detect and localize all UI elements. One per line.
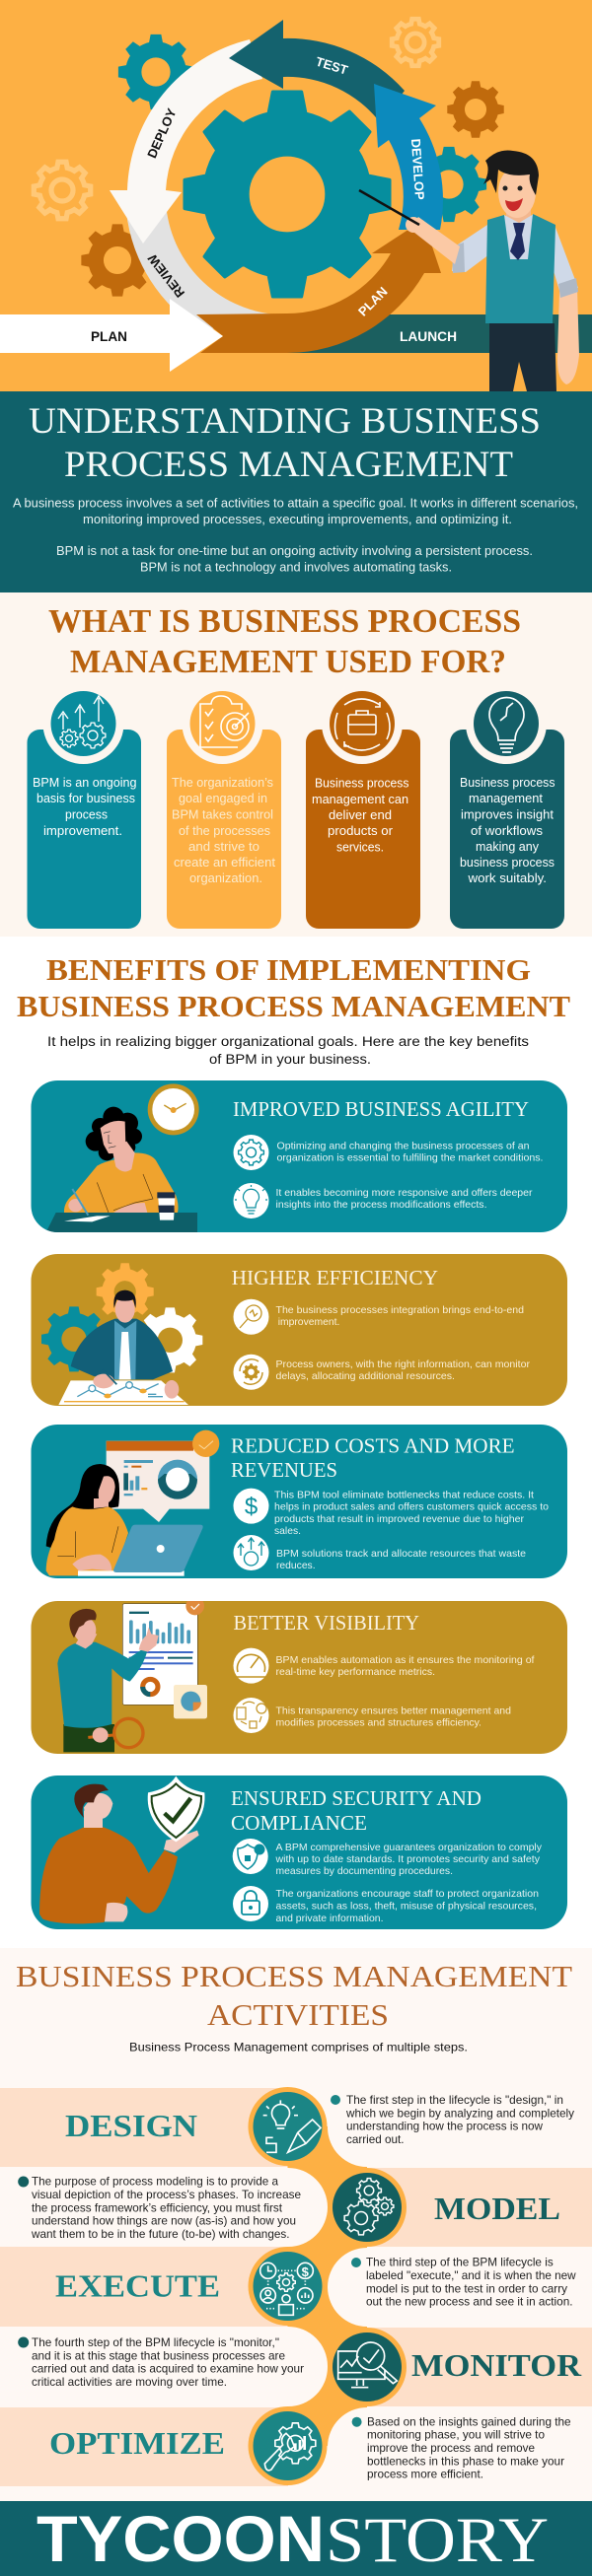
heading: ensured security and compliance: ENSURED SECURITY AND [231,1786,481,1810]
heading: better visibility: BETTER VISIBILITY [233,1611,419,1635]
heading: reduced costs and more revenues: REDUCED COSTS AND MORE [231,1433,515,1457]
step: design [65,2092,574,2161]
text: model description: want them to be in the future (to-be) with changes. [31,2227,290,2241]
illustration: man presenting report [57,1597,207,1752]
text block: intro: BPM is not a technology and involves automating tasks. [140,560,452,574]
text: security point two: assets, such as loss, theft, misuse of physical resources, [276,1901,537,1913]
card: improves insight [450,683,564,929]
heading: understanding business process management: UNDERSTANDING BUSINESS [29,401,541,442]
heading: reduced costs and more revenues: REVENUES [231,1458,337,1482]
heading: what is BPM used for [48,603,521,680]
text: costs point one: helps in product sales and offers customers quick access to [274,1501,549,1513]
heading: execute: EXECUTE [55,2268,220,2304]
arrow: deploy [110,39,262,244]
text: optimize description: Based on the insights gained during the [367,2414,571,2428]
heading: what is BPM used for: MANAGEMENT USED FOR? [70,644,506,680]
icon: arrows and gears [58,696,106,748]
text: design description: understanding how the process is now [346,2120,543,2133]
text: card one: process [65,808,108,822]
panel: reduced costs and more revenues [32,1425,567,1578]
icon: workflow circle [233,1698,268,1733]
text block: intro: A business process involves a set of activities to attain a specific goal. It works in different scenarios, [13,497,578,511]
icon: briefcase cycle [335,699,390,750]
label: plan: PLAN [91,328,127,344]
text: execute description: out the new process and see it in action. [366,2295,572,2309]
icon: faint gear top right [392,19,439,66]
text: card two [172,776,276,885]
text: costs point one: sales. [274,1525,301,1537]
text: card one: basis for business [37,792,135,805]
text: agility point one: Optimizing and changing the business processes of an [276,1141,530,1152]
text: card two: goal engaged in [179,792,267,805]
icon: execute network: $ [302,2264,310,2279]
icon: padlock circle [233,1886,268,1921]
heading: what is BPM used for: WHAT IS BUSINESS PROCESS [48,603,521,640]
text: security point one [274,1842,543,1877]
text: activities intro: Business Process Management comprises of multiple steps. [129,2041,468,2054]
text: costs point two: BPM solutions track and allocate resources that waste [276,1548,526,1560]
footer: Tycoonstory logo: STORY [326,2505,549,2576]
label: develop: DEVELOP [408,138,427,201]
text: agility point two: It enables becoming more responsive and offers deeper [276,1187,533,1199]
text: model description [18,2175,301,2241]
text: execute description: model is put to the test in order to carry [366,2281,567,2295]
icon: dollar circle: $ [245,1494,258,1520]
text: design description: The first step in the lifecycle is "design," in [346,2093,563,2107]
text: card three: Business process [315,777,408,791]
text: model description: The purpose of process modeling is to provide a [32,2175,278,2189]
text: visibility point two: modifies processes and structures efficiency. [276,1717,481,1729]
heading: higher efficiency: HIGHER EFFICIENCY [232,1266,438,1289]
icon: brown gear left [81,224,154,297]
text: optimize description: monitoring phase, you will strive to [367,2428,545,2442]
panel: higher efficiency [32,1254,567,1406]
text: monitor description: carried out and data is acquired to examine how your [32,2362,304,2376]
arrow: develop [374,84,443,230]
text: optimize description [352,2414,571,2481]
footer: Tycoonstory logo: TYCOON [37,2502,325,2575]
card: organization goal [167,683,281,929]
text: security point one: measures by documenting procedures. [276,1865,453,1877]
text: card two: of the processes [179,824,270,838]
text block: intro: BPM is not a task for one-time but an ongoing activity involving a persistent process. [56,544,533,558]
text: card two: organization. [189,871,262,885]
card: ongoing basis [28,683,141,929]
heading: understanding business process management [29,401,541,485]
text: card three [312,777,408,854]
heading: improved business agility: IMPROVED BUSINESS AGILITY [233,1097,529,1121]
footer: Tycoonstory logo [0,2501,592,2576]
text: efficiency point two: Process owners, with the right information, can monitor [276,1358,531,1370]
text: optimize description: process more efficient. [367,2468,483,2481]
icon: revenue arrows circle [233,1535,268,1570]
panel: BPM activities [0,1948,592,2501]
icon: clipboard target [200,696,249,747]
panel: what is BPM used for [0,592,592,937]
heading: ensured security and compliance: COMPLIANCE [231,1811,367,1835]
text: costs point one [274,1489,549,1537]
text: card two: create an efficient [174,856,276,870]
text: optimize description: improve the process and remove [367,2441,535,2455]
text: model description: visual depiction of the process’s phases. To increase [32,2188,301,2201]
panel: ensured security and compliance [32,1775,567,1929]
text: monitor description: critical activities are moving over time. [32,2375,227,2389]
text: visibility point one: BPM enables automation as it ensures the monitoring of [276,1654,535,1666]
text: agility point two [276,1187,533,1211]
text: card four: business process [460,856,555,870]
icon: teal gear right [411,147,486,222]
text: agility point one [276,1141,543,1164]
text: execute description: The third step of the BPM lifecycle is [366,2256,554,2269]
icon: design bulb and pencil [253,2092,322,2161]
text block: intro: monitoring improved processes, executing improvements, and optimizing it. [83,513,512,526]
text: card four: making any [476,840,540,854]
text: security point two: The organizations encourage staff to protect organization [276,1888,539,1900]
card: deliver products [306,683,420,929]
step: optimize [49,2411,571,2481]
text: efficiency point two [276,1358,531,1382]
step: monitor [18,2332,582,2402]
text: card one: BPM is an ongoing [33,776,137,790]
icon: shield lock circle [233,1839,268,1874]
text: costs point one: This BPM tool eliminate bottlenecks that reduce costs. It [274,1489,534,1500]
text: card four: improves insight [461,808,555,822]
heading: benefits of implementing BPM [17,952,570,1023]
text: card three: deliver end [329,808,392,822]
heading: benefits of implementing BPM: BUSINESS PROCESS MANAGEMENT [17,989,570,1023]
text: card one [33,776,137,838]
text: security point one: A BPM comprehensive guarantees organization to comply [276,1842,543,1853]
icon: gear circle [233,1135,268,1170]
text: agility point one: organization is essential to fulfilling the market conditions. [276,1152,543,1164]
text: card four: work suitably. [467,871,547,885]
text: security point two: and private information. [276,1913,383,1924]
heading: ensured security and compliance [231,1786,481,1835]
icon: faint gear left [34,162,91,219]
icon: dollar circle [233,1489,268,1524]
text block: benefits intro [47,1034,529,1067]
icon: model gears [333,2173,402,2242]
illustration: woman writing at desk [30,1083,199,1232]
icon: gauge circle [233,1648,268,1684]
text: visibility point two [276,1706,511,1729]
arrow: plan white [0,299,223,372]
text: card three: management can [312,793,408,806]
text: optimize description: bottlenecks in this phase to make your [367,2454,564,2468]
text: card four [460,776,555,885]
label: review: REVIEW [144,250,187,301]
text: monitor description: and it is at this stage that business processes are [32,2348,285,2362]
text: card two: The organization’s [172,776,273,790]
text: monitor description [18,2335,304,2389]
illustration: woman with laptop and dashboard [46,1430,219,1576]
icon: monitor and magnifier [333,2332,402,2402]
heading: understanding business process management: PROCESS MANAGEMENT [64,445,513,485]
text: costs point one: products that result in improved revenue due to higher [274,1513,524,1525]
text: efficiency point two: delays, allocating additional resources. [276,1370,455,1382]
text: design description: carried out. [346,2132,405,2146]
icon: wrench and gear [253,2411,322,2480]
step: model [18,2173,560,2242]
label: plan on arc: PLAN [355,284,391,319]
text: security point two [276,1888,539,1924]
text block: benefits intro: It helps in realizing bigger organizational goals. Here are the key benefits [47,1034,529,1049]
heading: reduced costs and more revenues [231,1433,515,1482]
text: costs point two: reduces. [276,1560,316,1571]
text block: benefits intro: of BPM in your business. [209,1052,371,1067]
text: visibility point two: This transparency ensures better management and [276,1706,511,1717]
illustration: man holding shield [39,1776,205,1923]
panel: hero illustration [0,0,592,391]
launch band [276,314,592,353]
heading: design: DESIGN [65,2108,197,2143]
panel: intro header [0,391,592,592]
icon: teal gear top left [118,35,193,109]
text: execute description: labeled "execute," and it is when the new [366,2268,576,2282]
text: model description: the process framework’s efficiency, you must first [32,2200,283,2214]
text: card three: services. [336,840,384,854]
text: visibility point one [276,1654,535,1678]
text block: intro [13,497,578,574]
text: card two: BPM takes control [172,808,273,822]
icon: light bulb [489,698,524,752]
step: execute [55,2252,576,2321]
text: card three: products or [328,824,393,838]
heading: benefits of implementing BPM: BENEFITS OF IMPLEMENTING [46,952,531,987]
text: design description [331,2093,574,2146]
text: efficiency point one: The business processes integration brings end-to-end [276,1304,524,1316]
heading: monitor: MONITOR [411,2347,582,2383]
icon: brown gear right [447,81,504,138]
text: security point one: with up to date standards. It promotes security and safety [274,1853,541,1865]
arrow: test [229,20,405,122]
label: test: TEST [314,54,349,78]
icon: execute network [253,2252,322,2321]
icon: gear cycle circle [233,1355,268,1390]
text: card four: of workflows [471,824,543,838]
text: execute description [351,2256,576,2309]
text: costs point two [276,1548,526,1571]
icon: main gear [185,92,390,297]
panel: better visibility [32,1597,567,1754]
orange process spine [0,2087,592,2486]
illustration: presenter [359,150,579,391]
text: card four: management [469,792,544,805]
heading: BPM activities: BUSINESS PROCESS MANAGEMENT [16,1959,572,1993]
text: design description: which we begin by analyzing and completely [345,2106,574,2120]
text: efficiency point one [276,1304,524,1328]
heading: BPM activities: ACTIVITIES [207,1997,389,2032]
icon: idea circle [233,1183,268,1218]
launch band: LAUNCH [400,328,457,344]
text: card one: improvement. [43,824,122,838]
arrow: plan brown [196,220,441,353]
text: card two: and strive to [188,840,259,854]
arrow: review [126,202,276,331]
label: deploy: DEPLOY [144,105,180,161]
peach step rows [0,2088,592,2486]
text: visibility point one: real-time key performance metrics. [276,1666,435,1678]
icon: magnifier circle [233,1299,268,1335]
text: model description: understand how things are now (as-is) and how you [32,2214,296,2228]
text: card four: Business process [460,776,555,790]
illustration: man with gears [41,1263,202,1405]
text: efficiency point one: improvement. [278,1316,339,1328]
heading: model: MODEL [434,2191,560,2226]
text: monitor description: The fourth step of the BPM lifecycle is "monitor," [32,2335,279,2349]
panel: improved business agility [30,1080,567,1232]
text: agility point two: insights into the process modifications effects. [276,1199,487,1211]
heading: optimize: OPTIMIZE [49,2425,225,2461]
heading: BPM activities [16,1959,572,2032]
